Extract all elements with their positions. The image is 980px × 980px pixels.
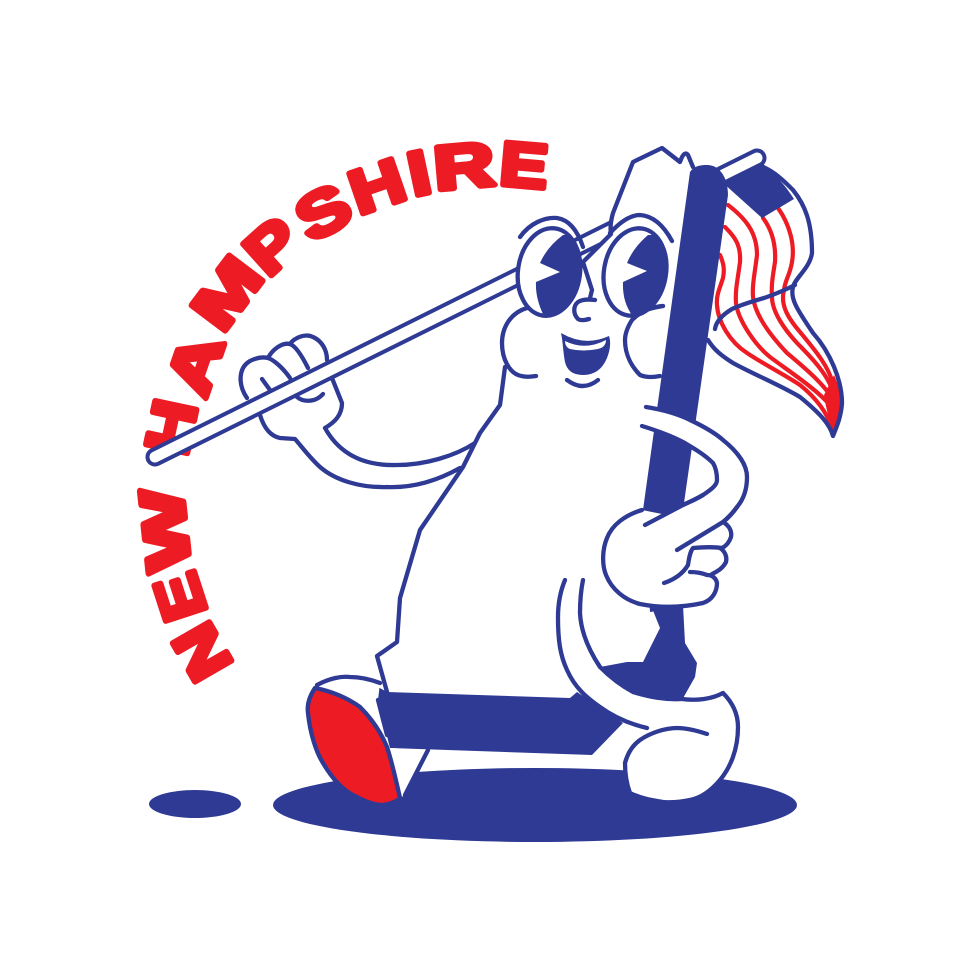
blue side of the state: right band	[643, 165, 728, 612]
right arm on hip	[603, 407, 747, 607]
left eye	[516, 216, 586, 318]
right cheek	[625, 306, 663, 377]
title: NEW HAMPSHIRE on an arc: W	[126, 485, 204, 574]
face	[502, 215, 680, 386]
title: NEW HAMPSHIRE on an arc: R	[431, 129, 497, 203]
state-shaped body	[377, 148, 700, 698]
right foot	[625, 693, 738, 802]
flag pole	[155, 158, 757, 457]
left cheek	[502, 308, 536, 377]
ground shadow: small	[149, 790, 241, 818]
title: NEW HAMPSHIRE on an arc: P	[230, 204, 314, 289]
title: NEW HAMPSHIRE on an arc: E	[497, 130, 551, 202]
title: NEW HAMPSHIRE on an arc: M	[178, 243, 276, 343]
title: NEW HAMPSHIRE on an arc: S	[283, 169, 362, 255]
blue side of the state: lower section	[600, 605, 697, 700]
ground shadow: large	[273, 768, 797, 842]
title: NEW HAMPSHIRE on an arc: N	[159, 611, 246, 693]
mouth	[561, 333, 610, 375]
blue side of the state: bottom edge	[375, 687, 623, 755]
flag stripes	[717, 205, 841, 434]
chin	[567, 380, 598, 386]
title: NEW HAMPSHIRE on an arc: E	[140, 565, 220, 629]
tail and back leg	[558, 580, 682, 728]
title: NEW HAMPSHIRE on an arc: I	[402, 137, 436, 209]
title: NEW HAMPSHIRE on an arc	[126, 129, 551, 693]
American flag	[708, 160, 842, 436]
right eye	[601, 212, 674, 318]
title: NEW HAMPSHIRE on an arc: A	[152, 324, 238, 404]
title: NEW HAMPSHIRE on an arc: H	[132, 394, 211, 461]
title: NEW HAMPSHIRE on an arc: H	[340, 145, 414, 228]
left arm and fist	[241, 336, 475, 487]
left foot with red sole	[308, 677, 428, 805]
redrawn cheek cap over right eye	[640, 306, 663, 312]
right hand gripping the band	[603, 495, 737, 607]
nose	[574, 300, 595, 320]
flag canton	[722, 160, 794, 218]
